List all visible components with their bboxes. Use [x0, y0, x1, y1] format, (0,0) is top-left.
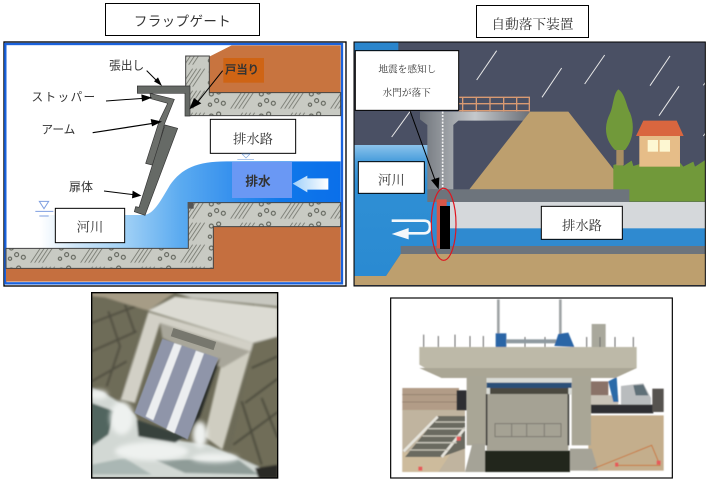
abutment face [121, 312, 253, 403]
gate body [134, 125, 178, 215]
label: 戸当り [189, 58, 264, 109]
grass [613, 160, 705, 202]
abutment top [148, 297, 278, 343]
callout: earthquake detection [355, 51, 459, 110]
label: 張出し [109, 59, 162, 86]
hoist [496, 333, 506, 347]
rain [392, 51, 705, 137]
base slab [427, 189, 629, 202]
label: 排水: 排水 [245, 173, 271, 188]
callout: earthquake detection: 地震を感知し [378, 64, 436, 76]
label: 河川: 河川 [77, 220, 103, 235]
embankment [469, 112, 629, 189]
safety tape [593, 445, 660, 469]
truck [590, 381, 608, 395]
label: ストッパー [32, 91, 152, 104]
label: 排水 [232, 162, 292, 198]
water [92, 388, 278, 478]
label: 戸当り: 戸当り [225, 63, 259, 77]
label: アーム: アーム [41, 124, 75, 137]
corner block [188, 202, 194, 209]
label: 排水路: 排水路 [562, 217, 602, 233]
overhang bracket [137, 86, 190, 116]
plate [171, 328, 216, 350]
frame [354, 42, 705, 286]
gate arm [146, 93, 174, 165]
label: 排水路 [541, 206, 622, 239]
gate door [487, 394, 568, 451]
deck slab [418, 346, 638, 369]
label: 排水路: 排水路 [233, 130, 273, 146]
railing [424, 335, 633, 347]
tree [606, 89, 633, 165]
heading: automatic drop device: 自動落下装置 [491, 16, 574, 32]
foam [89, 390, 238, 463]
drainage water [450, 228, 705, 246]
label: ストッパー: ストッパー [32, 91, 96, 104]
drop gate [437, 199, 450, 249]
opening [487, 378, 572, 395]
label: 河川: 河川 [378, 173, 405, 188]
control box [592, 324, 606, 348]
label: 扉体: 扉体 [69, 180, 93, 194]
heading: automatic drop device [476, 6, 588, 38]
railing [458, 97, 530, 112]
label: 排水路 [210, 119, 296, 153]
heading: flap gate [106, 4, 260, 36]
heading: flap gate: フラップゲート [134, 14, 231, 29]
masts [498, 299, 560, 335]
ground [355, 254, 705, 285]
top ledge [92, 293, 175, 311]
arrow: river outflow [392, 221, 430, 239]
house [636, 121, 684, 167]
label: 扉体 [69, 180, 141, 198]
photo: flap gate [89, 293, 278, 478]
gate tower and deck [420, 112, 530, 200]
label: アーム [41, 119, 162, 137]
panel: flap gate diagram [3, 41, 347, 287]
photo: drop gate facility [391, 298, 672, 478]
label: 河川 [55, 208, 125, 243]
stacked sandbags [402, 388, 459, 410]
water [40, 161, 341, 248]
lower soil [6, 227, 341, 282]
right stone wall [230, 336, 277, 468]
upper concrete wall [186, 56, 341, 116]
label: 張出し: 張出し [109, 59, 144, 72]
stairs [405, 416, 465, 457]
river [355, 43, 398, 53]
water level mark left [35, 201, 53, 216]
red ellipse highlight [431, 188, 456, 260]
columns [467, 375, 487, 445]
gate leaf [134, 339, 218, 440]
arrow: drainage flow [293, 176, 328, 192]
culvert [485, 451, 570, 472]
callout: earthquake detection: 水門が落下 [383, 87, 431, 99]
channel floor [401, 246, 705, 254]
panel: automatic drop device diagram [354, 42, 705, 286]
lower concrete [6, 203, 341, 268]
water level mark right [237, 154, 254, 159]
drainage channel wall [450, 202, 705, 229]
callout arrow [410, 111, 439, 189]
ground [402, 409, 465, 472]
label: 河川 [358, 162, 424, 193]
left stone wall [92, 365, 131, 400]
upper soil [209, 45, 341, 93]
